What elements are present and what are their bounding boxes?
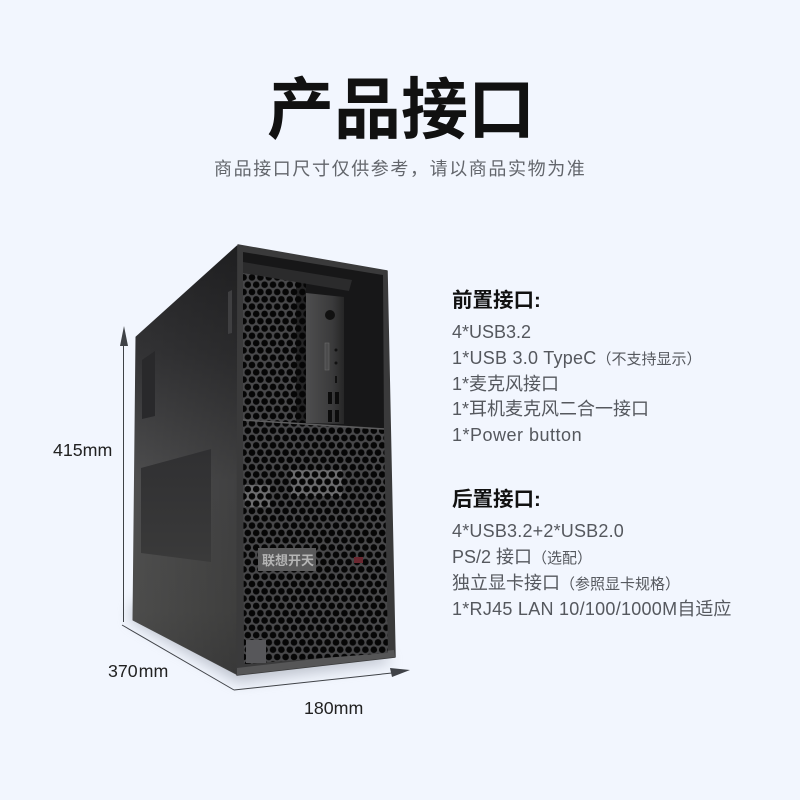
logo plate: 联想开天	[262, 553, 314, 568]
audio ports	[334, 348, 338, 383]
rear port list: PS/2 接口（选配）	[452, 547, 592, 567]
rear port list: 独立显卡接口（参照显卡规格）	[452, 573, 680, 593]
power button	[325, 310, 335, 320]
height arrow	[120, 326, 128, 622]
rear ports	[452, 488, 731, 619]
bottom lip	[237, 650, 395, 675]
width arrow	[234, 668, 410, 690]
label: height: 415mm	[53, 440, 112, 460]
front port list: 1*耳机麦克风二合一接口	[452, 399, 649, 419]
io panel	[306, 293, 344, 424]
side panel	[133, 246, 238, 675]
front ports	[452, 289, 702, 445]
floor shadow	[130, 600, 392, 682]
upper mesh shaded	[296, 281, 306, 423]
dimension lines	[120, 326, 410, 690]
lower mesh	[243, 420, 388, 664]
side shading	[133, 246, 238, 675]
top bar	[243, 262, 352, 291]
label: depth: 370mm	[108, 661, 168, 681]
upper mesh	[243, 273, 296, 423]
heading: rear ports: 后置接口:	[452, 488, 541, 511]
fan highlight	[291, 470, 342, 496]
product: tower workstation	[130, 245, 395, 682]
front port list: 1*Power button	[452, 425, 582, 445]
subtitle: 商品接口尺寸仅供参考，请以商品实物为准	[214, 159, 586, 179]
red badge	[354, 557, 363, 563]
corner square	[246, 640, 266, 663]
label: width: 180mm	[304, 698, 363, 718]
depth line	[122, 625, 234, 690]
usb ports	[328, 392, 339, 422]
left highlight	[245, 485, 270, 507]
rear port list	[452, 521, 731, 619]
front frame	[237, 245, 395, 675]
title: 产品接口	[267, 73, 535, 148]
front port list	[452, 322, 702, 445]
heading: front ports: 前置接口:	[452, 289, 541, 312]
divider highlight	[243, 420, 384, 429]
rear port list: 4*USB3.2+2*USB2.0	[452, 521, 624, 541]
front port list: 1*麦克风接口	[452, 374, 559, 394]
upper opening	[243, 252, 384, 430]
card slot	[325, 343, 329, 370]
logo plate	[258, 548, 316, 571]
front port list: 4*USB3.2	[452, 322, 531, 342]
front port list: 1*USB 3.0 TypeC（不支持显示）	[452, 348, 702, 368]
side vents	[141, 290, 232, 562]
rear port list: 1*RJ45 LAN 10/100/1000M自适应	[452, 599, 731, 619]
